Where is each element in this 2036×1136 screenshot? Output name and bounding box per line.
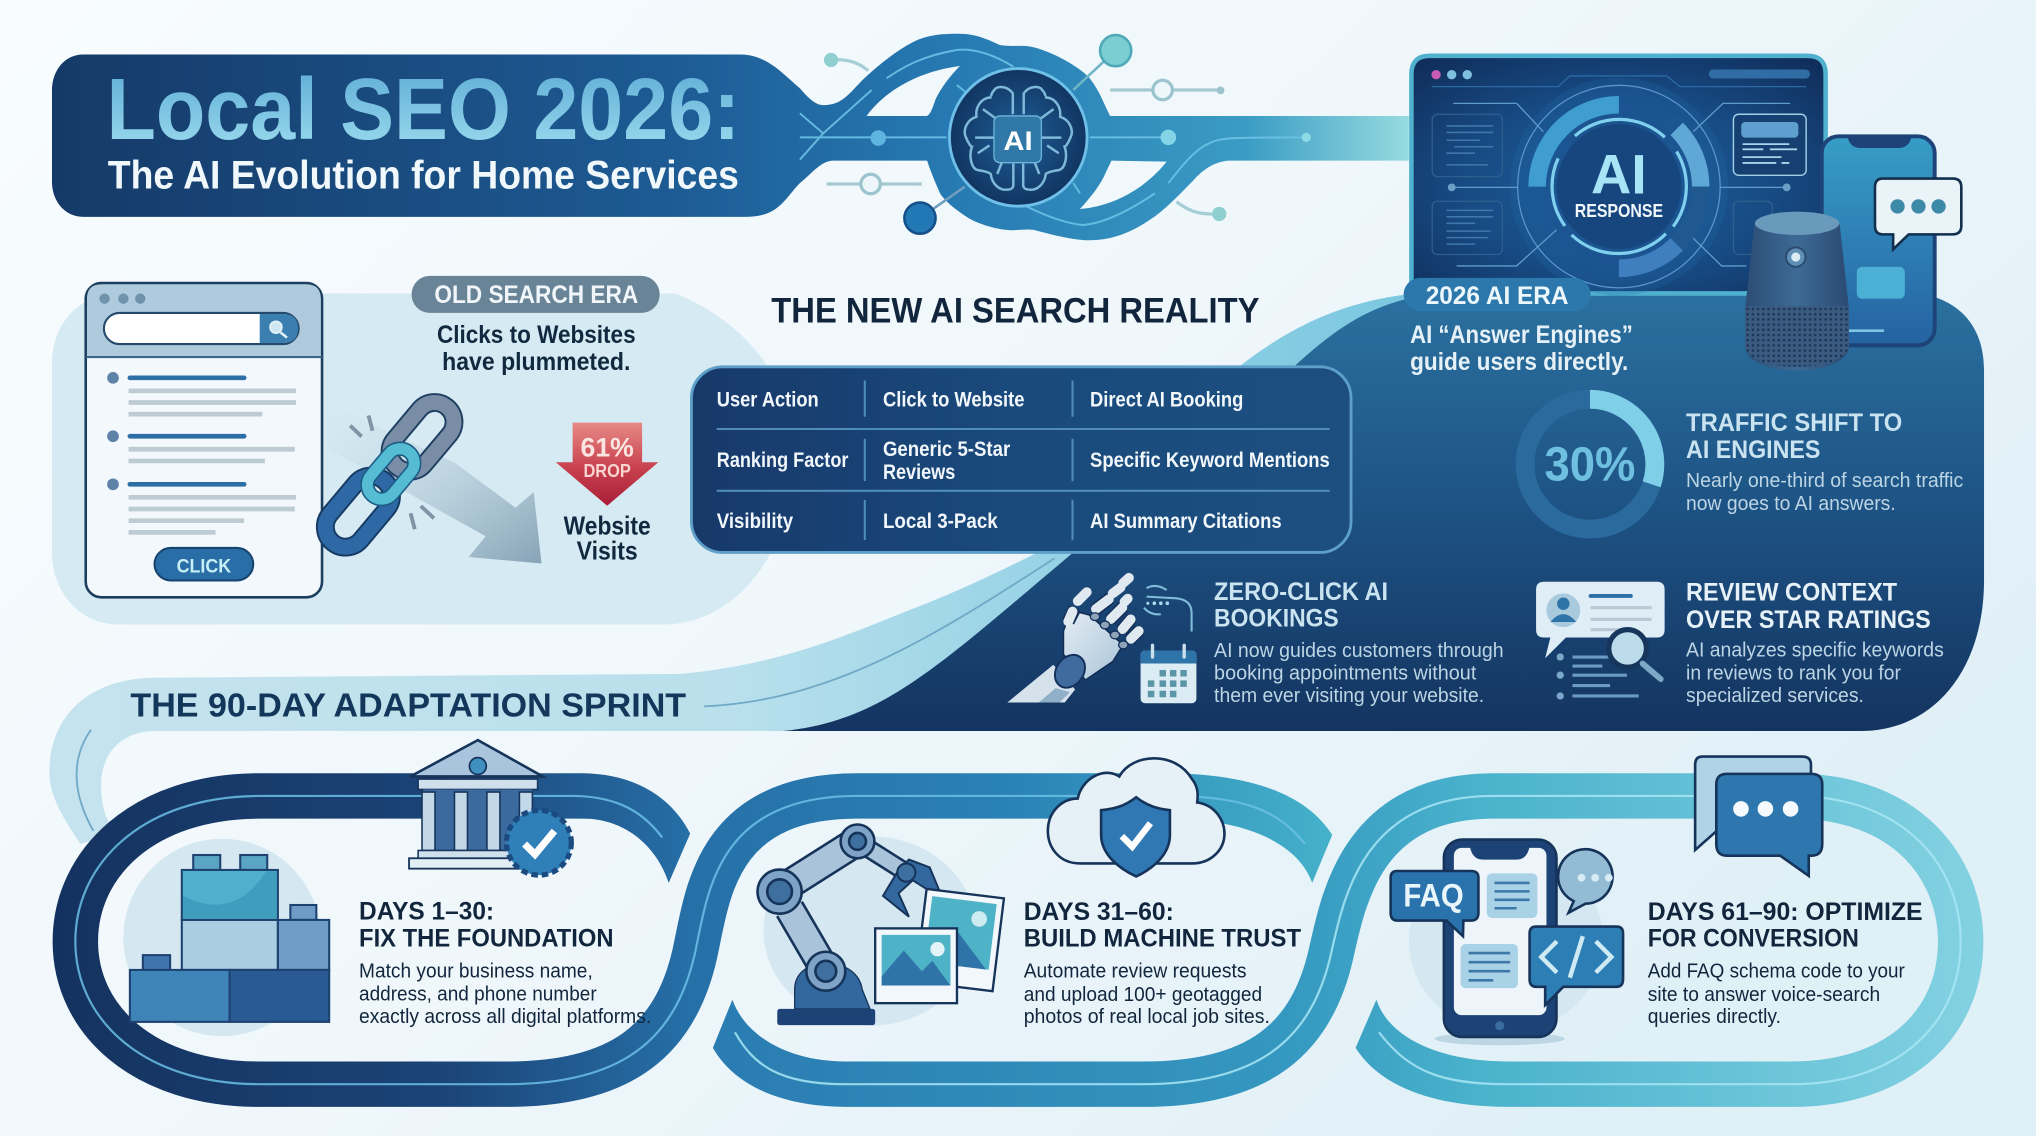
header banner (52, 34, 1409, 240)
comparison table (691, 367, 1351, 552)
text: traffic shift: Nearly one-third of search traffic (1686, 470, 1963, 492)
text: days 31-60: and upload 100+ geotagged (1024, 983, 1262, 1006)
comparison table: Specific Keyword Mentions (1090, 448, 1330, 472)
text: days 31-60: Automate review requests (1024, 960, 1247, 983)
comparison table: Ranking Factor (717, 448, 848, 472)
text: zero-click bookings: ZERO-CLICK AI (1214, 578, 1388, 606)
comparison table: User Action (717, 387, 819, 411)
panel: 2026 AI era dark background (783, 293, 1984, 731)
icon: stacked chat bubbles (1695, 757, 1822, 876)
text: traffic shift: now goes to AI answers. (1686, 493, 1896, 515)
icon: circuit nodes (824, 35, 1226, 234)
text: traffic shift: TRAFFIC SHIFT TO (1686, 409, 1902, 437)
text: clicks plummeted: have plummeted. (442, 348, 630, 376)
ribbon: days 31-60 bottom into days 61-90 loop (713, 796, 1961, 1107)
text: answer engines: AI “Answer Engines” (1410, 321, 1633, 349)
text: zero-click bookings: booking appointments without (1214, 663, 1477, 685)
icon: AI response monitor: RESPONSE (1575, 200, 1663, 221)
text: review context: OVER STAR RATINGS (1686, 606, 1931, 634)
badge: old search era (412, 276, 660, 313)
icon: AI response monitor: AI (1591, 142, 1647, 205)
panel: old search era background (52, 293, 795, 625)
text: days 31-60: photos of real local job sites. (1024, 1005, 1270, 1028)
icon: AI brain (949, 69, 1087, 206)
chart: 30% donut (1525, 399, 1655, 529)
text: days 1-30 (359, 897, 651, 1028)
icon: courthouse with check badge (409, 740, 571, 875)
text: days 61-90: queries directly. (1648, 1005, 1781, 1028)
ribbon: days 1-30 loop into days 31-60 top (75, 773, 1332, 1084)
text: days 1-30: DAYS 1–30: (359, 897, 494, 925)
icon: smart speaker (1745, 212, 1849, 371)
icon: browser window, old search: CLICK (177, 556, 231, 578)
icon: AI brain: AI (1003, 125, 1033, 156)
text: days 1-30: exactly across all digital platforms. (359, 1005, 651, 1028)
comparison table: Direct AI Booking (1090, 387, 1243, 411)
text: review context: AI analyzes specific keywords (1686, 640, 1944, 662)
icon: browser window, old search (86, 283, 322, 597)
comparison table: Visibility (717, 509, 793, 533)
text: answer engines: guide users directly. (1410, 348, 1628, 376)
text: zero-click bookings: AI now guides customers through (1214, 640, 1504, 662)
arrow: downward trend (327, 403, 541, 564)
sprint band swoosh (49, 293, 1428, 844)
icon: review bubble with magnifier (1536, 582, 1665, 700)
text: zero-click bookings: them ever visiting your website. (1214, 685, 1484, 707)
text: days 31-60: BUILD MACHINE TRUST (1024, 925, 1302, 953)
text: days 61-90: site to answer voice-search (1648, 983, 1880, 1006)
text: answer engines (1410, 321, 1633, 376)
chart: 30% donut: 30% (1545, 438, 1635, 491)
icon: broken chain link (317, 395, 462, 555)
text: days 61-90 (1648, 898, 1923, 1028)
text: zero-click bookings (1214, 578, 1504, 707)
text: website visits (564, 510, 651, 566)
badge: old search era: OLD SEARCH ERA (434, 282, 638, 309)
icon: robot hand with calendar (1007, 578, 1196, 703)
title: Local SEO 2026: (106, 61, 740, 158)
text: days 1-30: address, and phone number (359, 983, 597, 1006)
icon: 61% drop arrow (556, 423, 658, 506)
text: review context: REVIEW CONTEXT (1686, 579, 1898, 607)
text: review context (1686, 579, 1944, 707)
text: review context: specialized services. (1686, 685, 1864, 707)
text: zero-click bookings: BOOKINGS (1214, 605, 1339, 633)
comparison table: Local 3-Pack (883, 509, 998, 533)
icon: robotic arm with photos (758, 825, 1004, 1026)
comparison table: Reviews (883, 460, 955, 484)
text: review context: in reviews to rank you for (1686, 663, 1901, 685)
text: days 61-90: DAYS 61–90: OPTIMIZE (1648, 898, 1923, 926)
text: traffic shift: AI ENGINES (1686, 436, 1820, 464)
text: clicks plummeted: Clicks to Websites (437, 321, 636, 349)
text: days 31-60 (1024, 898, 1302, 1028)
icon: 61% drop arrow: 61% (581, 431, 634, 462)
text: website visits: Website (564, 510, 651, 540)
icon: 61% drop arrow: DROP (583, 461, 631, 481)
subtitle: The AI Evolution for Home Services (108, 152, 739, 197)
icon: phone with FAQ bubbles: FAQ (1403, 877, 1464, 913)
text: days 61-90: Add FAQ schema code to your (1648, 960, 1905, 983)
icon: phone with FAQ bubbles (1391, 840, 1623, 1045)
badge: 2026 AI era (1404, 278, 1591, 311)
icon: smartphone with chat bubble (1822, 136, 1961, 345)
icon: cloud with shield (1048, 758, 1224, 876)
heading: new AI search reality: THE NEW AI SEARCH REALITY (771, 292, 1260, 331)
badge: 2026 AI era: 2026 AI ERA (1426, 282, 1569, 310)
text: days 1-30: FIX THE FOUNDATION (359, 925, 614, 953)
text: website visits: Visits (577, 536, 638, 566)
comparison table: AI Summary Citations (1090, 509, 1282, 533)
text: days 61-90: FOR CONVERSION (1648, 925, 1859, 953)
icon: building blocks (123, 839, 329, 1036)
comparison table: Generic 5-Star (883, 437, 1010, 461)
icon: AI response monitor (1411, 56, 1826, 296)
text: days 31-60: DAYS 31–60: (1024, 898, 1174, 926)
text: days 1-30: Match your business name, (359, 960, 593, 983)
comparison table: Click to Website (883, 387, 1025, 411)
text: traffic shift (1686, 409, 1963, 515)
text: clicks plummeted (437, 321, 636, 376)
section heading: 90-day sprint: THE 90-DAY ADAPTATION SPRINT (130, 687, 686, 725)
